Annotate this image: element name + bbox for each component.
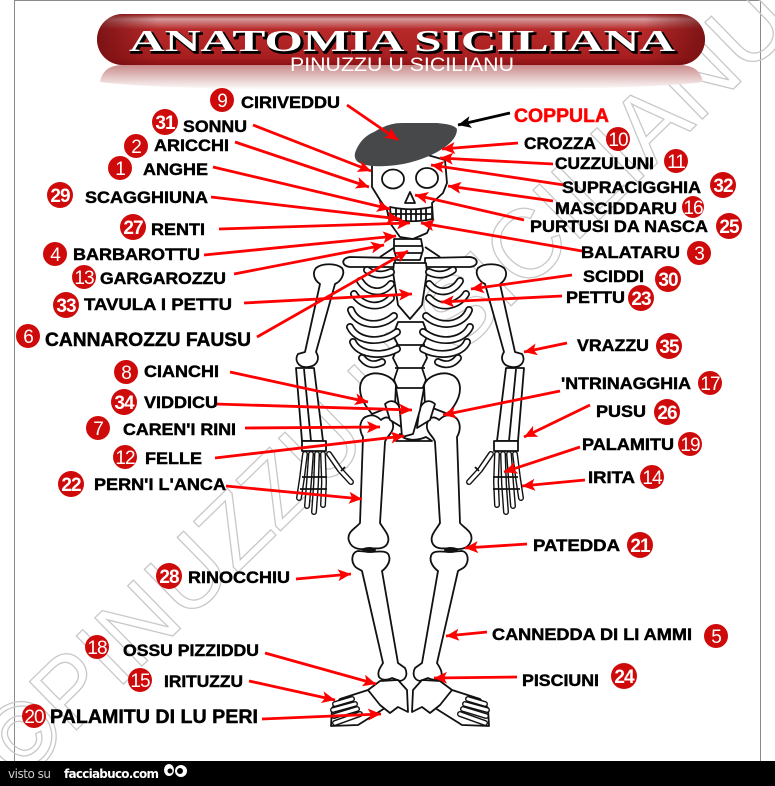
- callout 22 pern'i l'anca: PERN'I L'ANCA: [94, 476, 226, 494]
- callout 16 masciddaru: MASCIDDARU: [555, 200, 677, 218]
- skull: [372, 150, 447, 239]
- callout 18 ossu pizziddu: 18: [87, 638, 107, 659]
- callout 6 cannarozzu fausu: 6: [23, 327, 33, 348]
- callout 12 felle: [113, 436, 404, 469]
- footer bar: [0, 761, 775, 786]
- callout 1 anghe: 1: [115, 159, 125, 180]
- sacrum: [396, 388, 424, 437]
- callout 25 purtusi da nasca: PURTUSI DA NASCA: [530, 218, 708, 236]
- callout 10 crozza: [442, 127, 630, 153]
- callout 26 pusu: PUSU: [596, 403, 646, 421]
- neck: [394, 239, 423, 260]
- callout 2 aricchi: 2: [131, 137, 141, 158]
- callout 17 ntrinagghia: [443, 371, 722, 415]
- callout 34 viddicu: 34: [114, 393, 135, 414]
- callout 6 cannarozzu fausu: [16, 251, 408, 351]
- callout 4 barbarottu: [43, 236, 396, 266]
- callout 27 renti: RENTI: [151, 221, 205, 239]
- callout 4 barbarottu: BARBAROTTU: [73, 246, 200, 264]
- callout 19 palamitu: PALAMITU: [582, 436, 674, 454]
- callout 19 palamitu: [504, 432, 702, 472]
- callout 12 felle: FELLE: [145, 450, 202, 468]
- spine divisions: [395, 345, 425, 368]
- callout 13 gargarozzu: GARGAROZZU: [100, 270, 226, 288]
- footer visto su: visto su: [8, 767, 51, 781]
- callout 9 ciriveddu: [210, 88, 398, 140]
- callout 1 anghe: [108, 156, 390, 209]
- callout coppula: [458, 106, 609, 127]
- callout 32 supracigghia: SUPRACIGGHIA: [562, 179, 701, 197]
- neck rings: [394, 246, 422, 253]
- callout 29 scagghiuna: SCAGGHIUNA: [85, 189, 208, 207]
- title banner: [97, 14, 705, 90]
- callout 3 balataru: 3: [694, 244, 704, 265]
- callout 1 anghe: ANGHE: [143, 161, 208, 179]
- callout 32 supracigghia: [431, 165, 736, 198]
- footer site name: facciabuco.com: [64, 767, 159, 781]
- callout 11 cuzzuluni: 11: [667, 152, 685, 173]
- callout 14 irita: [522, 465, 664, 489]
- callout 2 aricchi: [124, 134, 369, 187]
- callout 26 pusu: [524, 399, 680, 437]
- callout 6 cannarozzu fausu: CANNAROZZU FAUSU: [45, 330, 251, 351]
- title: ANATOMIA SICILIANA: [131, 25, 678, 60]
- callout 11 cuzzuluni: CUZZULUNI: [555, 155, 654, 173]
- callout 28 rinocchiu: [156, 563, 351, 589]
- callout 27 renti: 27: [123, 218, 143, 239]
- callout 3 balataru: [421, 223, 711, 265]
- callout 14 irita: IRITA: [588, 469, 635, 487]
- callout 24 pisciuni: [434, 663, 637, 690]
- callout 21 patedda: 21: [630, 536, 651, 557]
- callout 21 patedda: PATEDDA: [533, 537, 620, 555]
- callout 23 pettu: 23: [631, 289, 651, 310]
- callout 26 pusu: 26: [657, 403, 677, 424]
- callout 17 ntrinagghia: 17: [700, 374, 720, 395]
- callout 33 tavula i pettu: 33: [56, 296, 76, 317]
- callout 16 masciddaru: 16: [683, 198, 703, 219]
- callout 15 irituzzu: 15: [130, 671, 150, 692]
- right half: [412, 247, 524, 726]
- callout 8 cianchi: [114, 360, 368, 402]
- callout 24 pisciuni: PISCIUNI: [522, 672, 599, 690]
- callout 15 irituzzu: [128, 668, 335, 700]
- callout 28 rinocchiu: 28: [159, 567, 179, 588]
- callout 28 rinocchiu: RINOCCHIU: [188, 569, 290, 587]
- callout 33 tavula i pettu: [53, 292, 412, 318]
- callout 24 pisciuni: 24: [614, 667, 635, 688]
- callout 30 sciddi: 30: [658, 270, 678, 291]
- callout 5 cannedda di li ammi: CANNEDDA DI LI AMMI: [492, 626, 692, 644]
- callout 33 tavula i pettu: TAVULA I PETTU: [84, 295, 232, 314]
- callout 29 scagghiuna: [47, 182, 400, 219]
- callout 8 cianchi: CIANCHI: [144, 363, 219, 381]
- callout 30 sciddi: [471, 266, 681, 292]
- spine: [393, 322, 428, 392]
- callout 12 felle: 12: [115, 448, 135, 469]
- callout 4 barbarottu: 4: [50, 245, 61, 266]
- callout 3 balataru: BALATARU: [581, 244, 680, 262]
- callout 35 vrazzu: VRAZZU: [577, 337, 649, 355]
- ribs: [350, 270, 470, 364]
- callout 20 palamitu di lu peri: PALAMITU DI LU PERI: [50, 707, 258, 728]
- subtitle: PINUZZU U SICILIANU: [290, 55, 514, 76]
- sternum: [393, 263, 427, 319]
- callout 7 caren'i rini: [86, 416, 380, 440]
- callout 5 cannedda di li ammi: [446, 624, 728, 648]
- callout 11 cuzzuluni: [440, 149, 688, 173]
- callout 18 ossu pizziddu: [85, 635, 376, 684]
- callout 14 irita: 14: [642, 468, 663, 489]
- callout 9 ciriveddu: 9: [217, 91, 227, 112]
- callout 5 cannedda di li ammi: 5: [711, 627, 721, 648]
- callout 19 palamitu: 19: [680, 435, 700, 456]
- callout 8 cianchi: 8: [121, 363, 131, 384]
- callout 31 sonnu: [152, 109, 371, 171]
- callout 30 sciddi: SCIDDI: [583, 268, 644, 286]
- callout 16 masciddaru: [448, 186, 704, 219]
- callout 10 crozza: 10: [608, 130, 628, 151]
- callout coppula: COPPULA: [514, 106, 609, 127]
- callout 23 pettu: PETTU: [566, 289, 625, 307]
- callout 35 vrazzu: 35: [659, 337, 680, 358]
- callout 29 scagghiuna: 29: [50, 186, 70, 207]
- callout 34 viddicu: VIDDICU: [144, 394, 218, 412]
- callout 20 palamitu di lu peri: 20: [24, 707, 44, 728]
- callout 20 palamitu di lu peri: [22, 704, 381, 728]
- callout 21 patedda: [465, 532, 653, 558]
- callout 13 gargarozzu: [72, 245, 384, 289]
- callout 9 ciriveddu: CIRIVEDDU: [241, 94, 340, 112]
- callout 31 sonnu: 31: [155, 113, 176, 134]
- skeleton: [296, 150, 524, 726]
- title highlight: ANATOMIA SICILIANA: [129, 23, 676, 58]
- right callouts: [415, 106, 742, 690]
- callout 10 crozza: CROZZA: [524, 135, 596, 153]
- callout 32 supracigghia: 32: [713, 176, 733, 197]
- callout 27 renti: [120, 214, 410, 240]
- left callouts: [16, 88, 412, 728]
- callout 13 gargarozzu: 13: [74, 268, 94, 289]
- callout 25 purtusi da nasca: [415, 195, 742, 239]
- callout 31 sonnu: SONNU: [183, 118, 247, 136]
- callout 25 purtusi da nasca: 25: [719, 217, 740, 238]
- callout 17 ntrinagghia: 'NTRINAGGHIA: [561, 375, 691, 393]
- callout 22 pern'i l'anca: [58, 471, 362, 499]
- ribs inner: [350, 270, 470, 364]
- callout 22 pern'i l'anca: 22: [61, 475, 81, 496]
- callout 18 ossu pizziddu: OSSU PIZZIDDU: [123, 642, 259, 660]
- callout 34 viddicu: [111, 389, 412, 415]
- pubis: [396, 434, 432, 441]
- callout 7 caren'i rini: CAREN'I RINI: [123, 421, 236, 439]
- icon: eyes: [164, 764, 187, 777]
- callout 2 aricchi: ARICCHI: [154, 137, 229, 155]
- callout 7 caren'i rini: 7: [93, 419, 103, 440]
- callout 15 irituzzu: IRITUZZU: [164, 673, 243, 691]
- callout 23 pettu: [441, 285, 654, 311]
- icon: beret: [355, 123, 457, 166]
- callout 35 vrazzu: [524, 333, 682, 359]
- left half: [296, 247, 408, 726]
